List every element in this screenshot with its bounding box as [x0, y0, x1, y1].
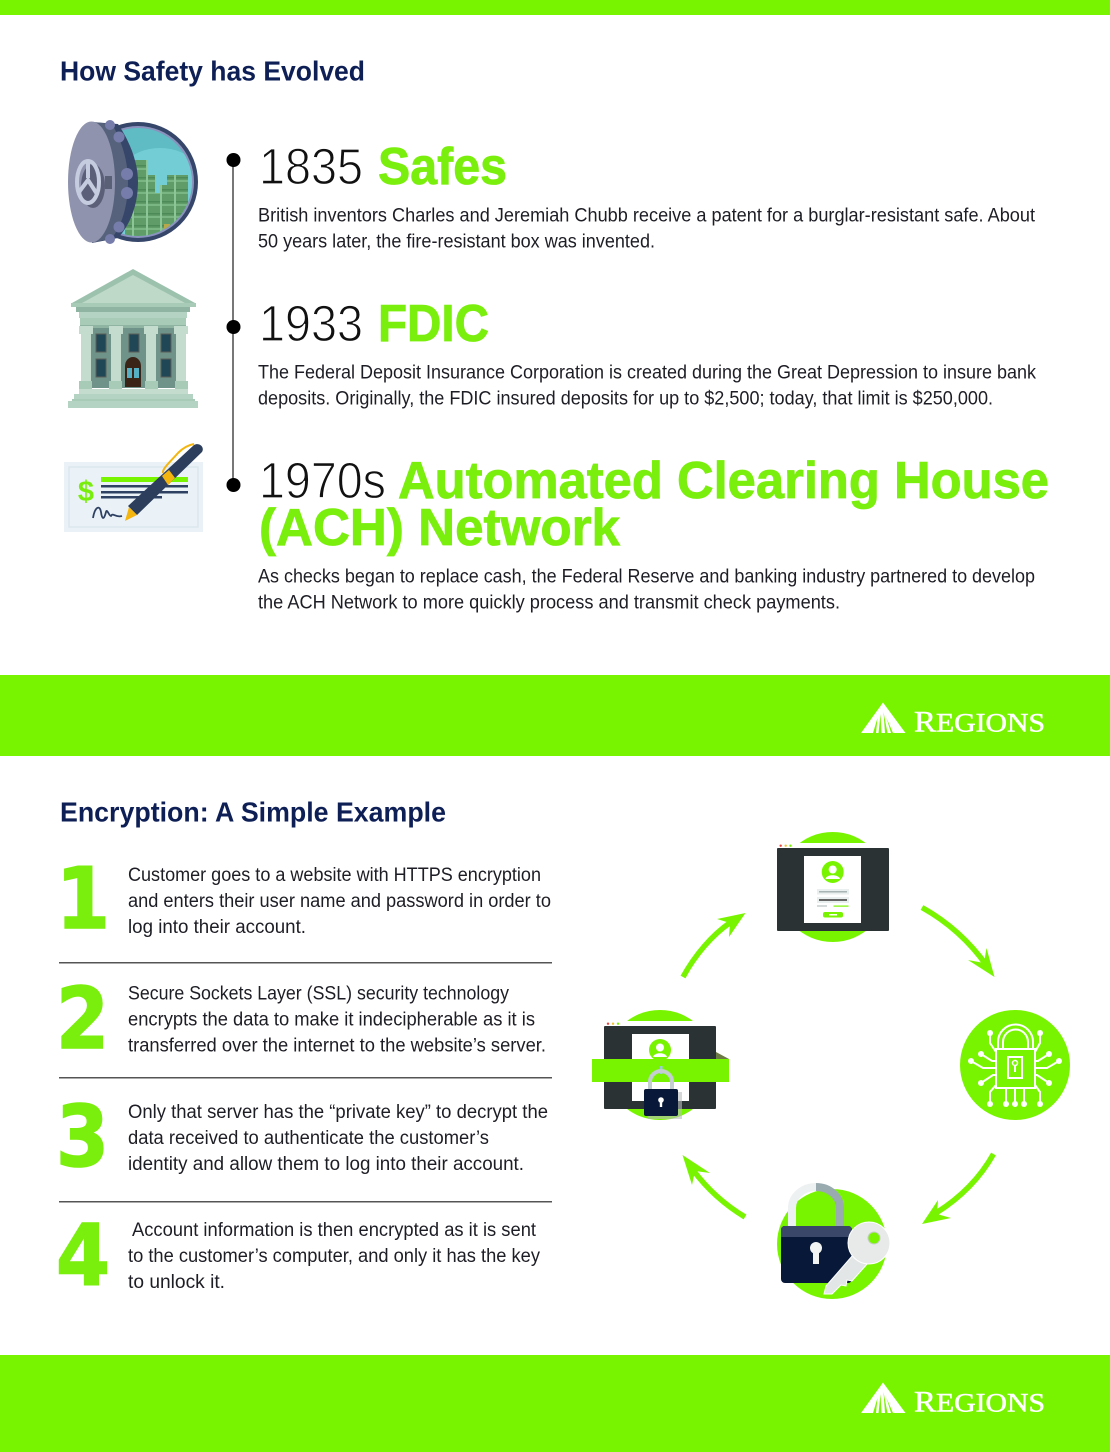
step 2 [56, 970, 546, 1069]
icon: lock and key [777, 1187, 890, 1299]
entry: 1970s ACH Network [258, 452, 1049, 614]
bottom green band with logo [0, 1355, 1110, 1452]
icon: encryption chip [960, 1010, 1070, 1120]
step 3 text: Only that server has the “private key” to decrypt the [128, 1102, 548, 1123]
logo: Regions: EGIONS [936, 1388, 1045, 1418]
body text: The Federal Deposit Insurance Corporation is created during the Great Depression to insure bank [258, 363, 1036, 384]
entry: 1933 FDIC [258, 295, 1036, 410]
step 3 text: identity and allow them to log into their account. [128, 1154, 524, 1175]
label Automated Clearing House: Automated Clearing House [398, 452, 1049, 510]
number 2: 2 [56, 970, 109, 1069]
step 3 text: data received to authenticate the customer’s [128, 1128, 489, 1149]
step 4 text: to the customer’s computer, and only it has the key [128, 1246, 540, 1267]
body text: As checks began to replace cash, the Federal Reserve and banking industry partnered to develop [258, 567, 1035, 588]
timeline [226, 153, 240, 492]
icon: locked browser window [592, 1010, 729, 1120]
logo: Regions [861, 702, 1045, 738]
year 1933: 1933 [259, 295, 363, 352]
body text: British inventors Charles and Jeremiah Chubb receive a patent for a burglar-resistant safe. About [258, 206, 1036, 226]
body text [258, 567, 1035, 614]
step 1 text: and enters their user name and password in order to [128, 891, 551, 912]
step 2 text: encrypts the data to make it indecipherable as it is [128, 1010, 535, 1030]
step 2 text: Secure Sockets Layer (SSL) security technology [128, 984, 509, 1004]
step 1 text: log into their account. [128, 917, 306, 938]
step 2 text [128, 984, 546, 1056]
label FDIC: FDIC [378, 295, 489, 353]
entry: 1835 Safes [258, 138, 1036, 252]
middle green band with logo [0, 675, 1110, 756]
body text: the ACH Network to more quickly process and transmit check payments. [258, 593, 840, 614]
icon: check and pen: $ [78, 476, 94, 508]
body text [258, 206, 1036, 252]
step 4 text: Account information is then encrypted as it is sent [132, 1220, 537, 1241]
label Safes: Safes [378, 138, 507, 196]
number 1: 1 [56, 850, 110, 949]
step 1 text [128, 865, 551, 938]
arrow: browser to login [683, 913, 746, 977]
step 3 [56, 1088, 548, 1187]
arrow: lock and key to browser [682, 1155, 745, 1217]
step 1 text: Customer goes to a website with HTTPS encryption [128, 865, 541, 886]
heading: Encryption: A Simple Example: Encryption: A Simple Example [60, 796, 446, 828]
body text: deposits. Originally, the FDIC insured deposits for up to $2,500; today, that limit is $250,000. [258, 389, 993, 410]
logo: Regions [861, 1382, 1045, 1418]
step 2 text: transferred over the internet to the website’s server. [128, 1036, 546, 1056]
top green band [0, 0, 1110, 15]
step 4 text [128, 1220, 540, 1293]
icon: check and pen [64, 444, 203, 532]
body text: 50 years later, the fire-resistant box was invented. [258, 232, 655, 252]
logo: Regions: R [914, 1386, 936, 1418]
logo: Regions: R [914, 706, 936, 738]
step 3 text [128, 1102, 548, 1175]
year 1970s: 1970s [259, 452, 386, 509]
step 4 text: to unlock it. [128, 1272, 225, 1293]
logo: Regions: EGIONS [936, 708, 1045, 738]
label (ACH) Network: (ACH) Network [259, 499, 620, 557]
body text [258, 363, 1036, 410]
arrow: login to chip [922, 908, 994, 977]
step 1 [56, 850, 551, 949]
year 1835: 1835 [259, 138, 363, 195]
arrow: chip to lock and key [922, 1154, 994, 1224]
heading: How Safety has Evolved: How Safety has Evolved [60, 56, 365, 86]
step 4 [56, 1207, 540, 1306]
icon: bank building [68, 269, 198, 408]
icon: login browser window [770, 832, 895, 942]
icon: bank vault [68, 120, 198, 244]
number 3: 3 [56, 1088, 109, 1187]
number 4: 4 [56, 1207, 110, 1306]
